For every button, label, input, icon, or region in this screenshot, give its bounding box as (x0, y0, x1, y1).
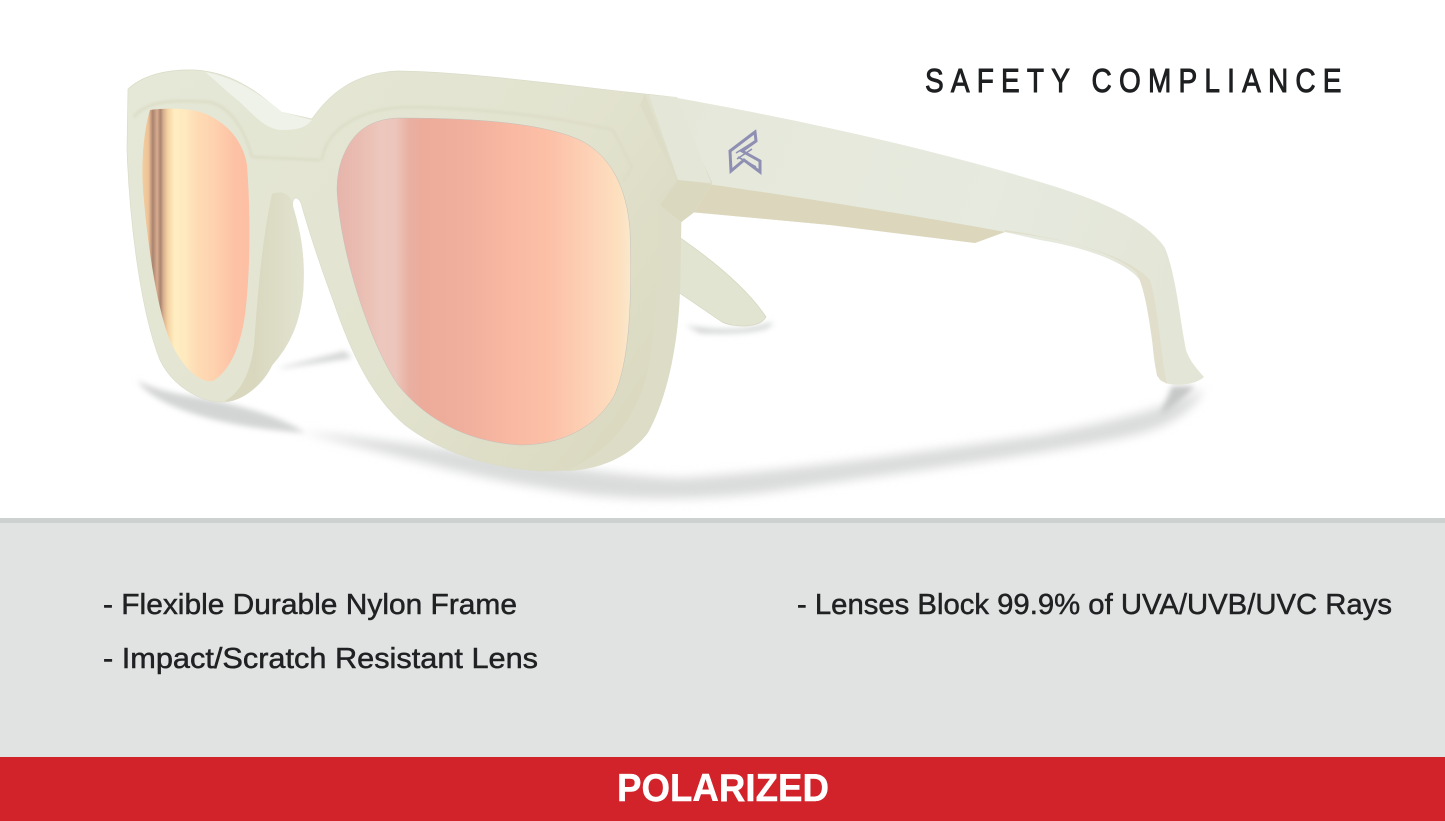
bridge highlight (205, 72, 312, 130)
feature: impact resistant lens: - Impact/Scratch Resistant Lens (103, 643, 538, 675)
ground shadow (137, 322, 1203, 499)
sunglasses (127, 70, 1204, 471)
banner text: POLARIZED (617, 767, 829, 810)
right lens (337, 118, 631, 445)
nose pad (225, 192, 304, 401)
banner: polarized (0, 757, 1445, 821)
feature: nylon frame: - Flexible Durable Nylon Frame (103, 589, 517, 621)
hinge facet (649, 95, 711, 183)
far temple arm (678, 237, 766, 326)
end piece shading (565, 94, 712, 471)
feature: UV protection: - Lenses Block 99.9% of UVA/UVB/UVC Rays (797, 589, 1392, 621)
near temple arm (672, 97, 1204, 385)
front frame (127, 70, 712, 471)
title: SAFETY COMPLIANCE (925, 63, 1342, 100)
temple underside (690, 183, 1005, 243)
left lens (142, 109, 249, 381)
lens bevels (134, 101, 632, 182)
panel: features (0, 518, 1445, 757)
icon: temple logo (730, 132, 760, 172)
